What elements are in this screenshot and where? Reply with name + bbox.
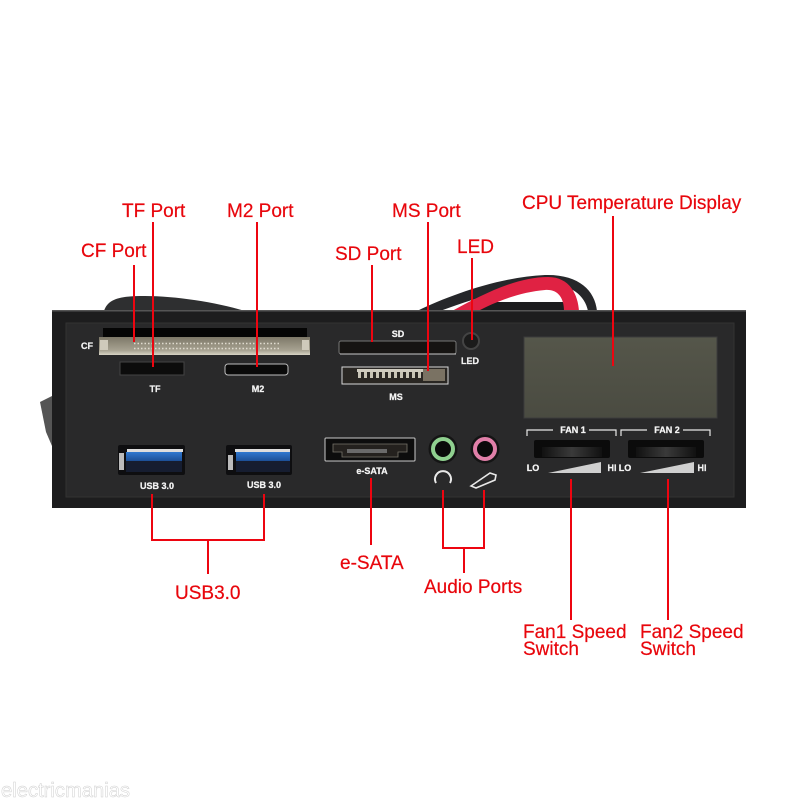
fan 1 control: HI [608,463,616,473]
USB 3.0 port 2: USB 3.0 [247,480,281,490]
audio jack: headphone [428,434,458,483]
callout: LED [457,237,494,340]
callout: Fan1 Speed Switch: Fan1 Speed [523,622,627,643]
fan 1 control: LO [527,463,539,473]
LED: LED [461,356,480,366]
fan 2 control: FAN 2 [654,425,680,435]
callout: LED: LED [457,237,494,258]
LED [461,333,480,366]
callout: M2 Port: M2 Port [227,201,294,222]
LCD display [524,337,717,418]
audio jack: microphone [470,434,500,488]
callout: Fan2 Speed Switch: Fan2 Speed [640,622,744,643]
SD port [339,329,456,354]
callout: Fan2 Speed Switch: Switch [640,639,696,660]
fan 1 control [527,425,616,473]
TF port [120,362,184,394]
callout: Fan2 Speed Switch [640,479,744,660]
callout: CF Port: CF Port [81,241,147,262]
callout: CPU Temperature Display: CPU Temperature Display [522,193,742,214]
callout: MS Port: MS Port [392,201,461,222]
callout: Fan1 Speed Switch: Switch [523,639,579,660]
fan 2 control: HI [698,463,706,473]
callout: TF Port: TF Port [122,201,186,222]
TF port: TF [150,384,161,394]
e-SATA port [325,438,415,476]
cables behind the panel [40,275,597,446]
USB 3.0 port 1 [118,445,185,491]
fan 2 control: LO [619,463,631,473]
callout: e-SATA [340,478,404,574]
callout: CF Port [81,241,147,342]
USB 3.0 port 2 [226,445,292,490]
CF port [81,328,310,355]
e-SATA port: e-SATA [356,466,388,476]
front panel [52,310,746,508]
fan 2 control [619,425,710,473]
callout: SD Port [335,244,402,342]
SD port: SD [392,329,405,339]
MS port [342,367,448,402]
MS port: MS [389,392,403,402]
fan 1 control: FAN 1 [560,425,586,435]
callout: USB3.0: USB3.0 [175,583,240,604]
callout: e-SATA: e-SATA [340,553,404,574]
CF port: CF [81,341,93,351]
callout: SD Port: SD Port [335,244,402,265]
USB 3.0 port 1: USB 3.0 [140,481,174,491]
callout: USB3.0 [152,494,264,604]
M2 port: M2 [252,384,264,394]
callout: Fan1 Speed Switch [523,479,627,660]
M2 port [225,364,288,394]
callout: Audio Ports [424,490,522,598]
callout: Audio Ports: Audio Ports [424,577,522,598]
